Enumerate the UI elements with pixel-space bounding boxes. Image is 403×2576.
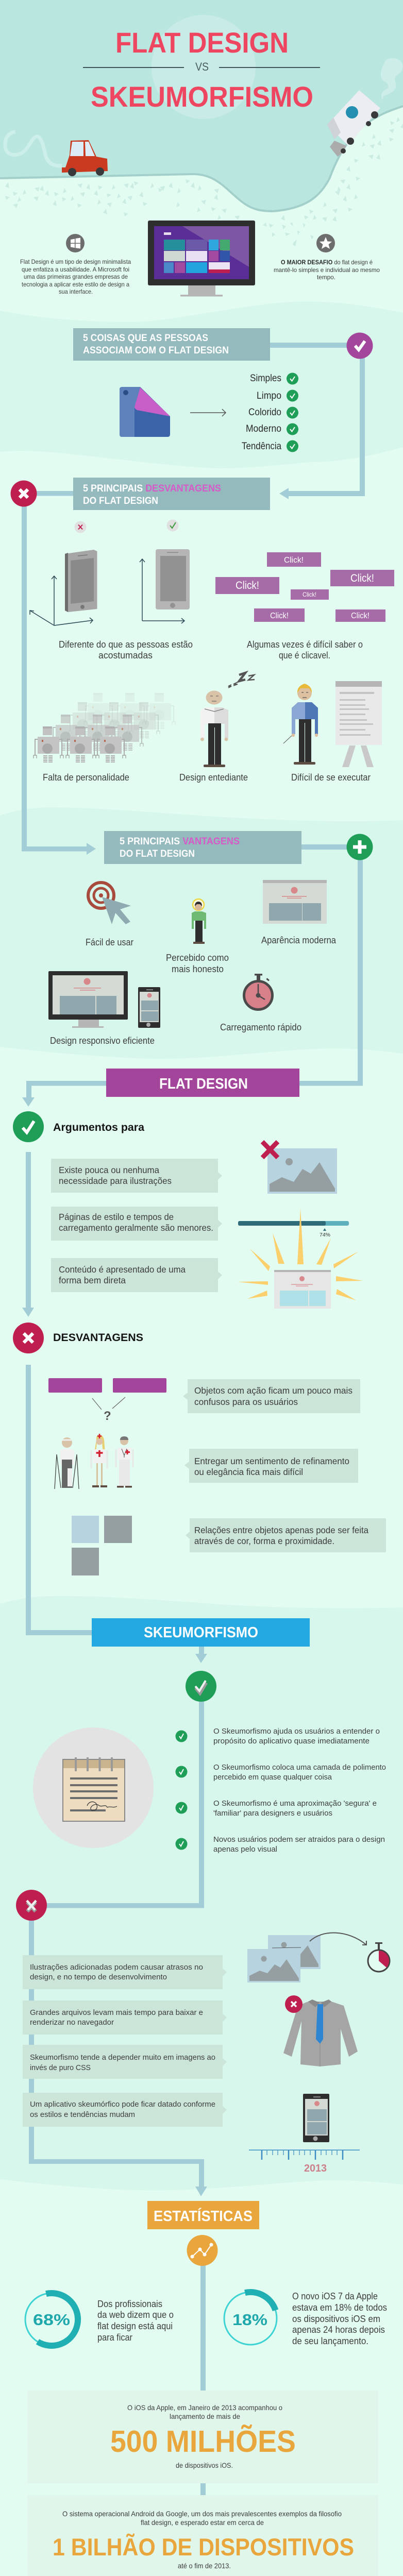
flow connectors bbox=[22, 343, 365, 2576]
icon: click buttons: Click! bbox=[236, 580, 259, 591]
icon: signed notepad bbox=[33, 1727, 154, 1848]
icon: two buttons question: ? bbox=[104, 1409, 111, 1423]
heading: flat design: FLAT DESIGN bbox=[159, 1076, 248, 1092]
text: flat design intro: que enfatiza a usabilidade. A Microsoft foi bbox=[22, 266, 129, 273]
list: flat design associations: Colorido bbox=[248, 407, 281, 418]
list: flat design associations bbox=[242, 373, 298, 452]
icon: click buttons: Click! bbox=[350, 572, 374, 584]
triangles under hero bbox=[263, 222, 314, 246]
icon: straight phone with axes bbox=[140, 549, 190, 623]
callout: object relations: através de cor, forma e proximidade. bbox=[194, 1536, 334, 1546]
text: disadvantage captions: acostumadas bbox=[98, 650, 153, 660]
list: skeumorphism pros: O Skeumorfismo é uma aproximação 'segura' e bbox=[213, 1799, 377, 1808]
background band: things people associate bbox=[0, 301, 403, 468]
callout: illustrations delays: Ilustrações adicionadas podem causar atrasos no bbox=[30, 1963, 203, 1972]
heading: vantagens: 5 PRINCIPAIS VANTAGENS bbox=[120, 836, 240, 847]
heading: estatisticas: ESTATÍSTICAS bbox=[154, 2207, 253, 2225]
panel: 1 bilhao: 1 BILHÃO DE DISPOSITIVOS bbox=[53, 2533, 354, 2561]
icon: red car bbox=[62, 140, 108, 176]
icon: click buttons: Click! bbox=[303, 591, 316, 598]
icon: white van bbox=[327, 90, 380, 157]
title: FLAT DESIGN bbox=[115, 26, 289, 59]
callout: large files: Grandes arquivos levam mais tempo para baixar e bbox=[30, 2008, 203, 2017]
heading: vantagens: DO FLAT DESIGN bbox=[120, 849, 195, 859]
background band: advantages bbox=[0, 807, 403, 1059]
panel: 1 bilhao: flat design, e esperado estar em cerca de bbox=[141, 2518, 264, 2527]
text: 68 percent: da web dizem que o bbox=[97, 2310, 174, 2320]
callout: depends on images: Skeumorfismo tende a depender muito em imagens ao bbox=[30, 2053, 215, 2062]
callout: dated app bbox=[23, 2093, 227, 2127]
icon: progress bar bbox=[238, 1221, 349, 1238]
title bbox=[83, 26, 320, 113]
callout: depends on images: invés de puro CSS bbox=[30, 2063, 91, 2072]
icon: honest man with halo bbox=[192, 899, 206, 944]
callout: direct content bbox=[51, 1258, 222, 1292]
list: skeumorphism pros: Novos usuários podem ser atraidos para o design bbox=[213, 1835, 385, 1844]
icon: stopwatch bbox=[244, 974, 272, 1010]
callout: illustrations bbox=[51, 1159, 222, 1193]
background band: skeumorphism bbox=[0, 1596, 403, 2190]
text: disadvantage captions: Diferente do que as pessoas estão bbox=[59, 639, 193, 650]
text: more disadvantages: Design entediante bbox=[179, 772, 248, 783]
caption: perceived honest bbox=[166, 953, 229, 974]
heading: flat design bbox=[106, 1069, 299, 1097]
text: disadvantage captions bbox=[59, 639, 363, 660]
icon: squares bbox=[72, 1516, 132, 1575]
text: flat design intro: uma das primeiras grandes empresas de bbox=[24, 273, 128, 280]
icon: green plus bbox=[346, 834, 373, 860]
panel: 500 milhoes: 500 MILHÕES bbox=[110, 2425, 296, 2459]
title: VS bbox=[195, 60, 209, 73]
text: flat design intro: Flat Design é um tipo de design minimalista bbox=[20, 258, 131, 265]
icon: tilted phone with axes bbox=[30, 550, 97, 625]
title: SKEUMORFISMO bbox=[91, 80, 313, 113]
arrow bbox=[190, 409, 226, 416]
icon: windows monitor bbox=[148, 221, 255, 297]
callout: confusing objects: confusos para os usuários bbox=[194, 1397, 298, 1407]
list: flat design associations: Limpo bbox=[257, 391, 281, 401]
icon: responsive desktop and phone bbox=[48, 971, 160, 1028]
chart: 18 percent ring bbox=[224, 2292, 277, 2345]
icon: progress bar: 74% bbox=[320, 1232, 330, 1238]
icon: bored man bbox=[200, 673, 255, 767]
text: more disadvantages bbox=[43, 772, 371, 783]
callout: refinement: Entregar um sentimento de refinamento bbox=[194, 1456, 349, 1466]
text: biggest challenge: tempo. bbox=[317, 274, 335, 281]
icon: presenter bbox=[283, 684, 318, 765]
text: biggest challenge bbox=[274, 259, 380, 281]
chart: 18 percent ring: 18% bbox=[232, 2311, 267, 2329]
list: flat design associations: Moderno bbox=[246, 423, 281, 434]
icon: shining window bbox=[238, 1208, 363, 1309]
heading: disadvantages: DESVANTAGENS bbox=[53, 1332, 143, 1344]
callout: object relations: Relações entre objetos apenas pode ser feita bbox=[194, 1525, 368, 1535]
icon: timeline 2013: 2013 bbox=[304, 2163, 327, 2174]
icon: modern window bbox=[263, 880, 327, 924]
icon: click buttons: Click! bbox=[284, 556, 304, 565]
icon: phone 2013 bbox=[303, 2094, 329, 2142]
icon: purple check bbox=[346, 333, 373, 359]
chart: 68 percent ring bbox=[25, 2293, 78, 2346]
heading: arguments for: Argumentos para bbox=[53, 1122, 144, 1133]
list: skeumorphism pros bbox=[175, 1727, 386, 1854]
icon: click buttons: Click! bbox=[270, 612, 289, 620]
heading: desvantagens: DO FLAT DESIGN bbox=[83, 496, 158, 506]
text: flat design intro bbox=[20, 258, 131, 295]
icon: target and cursor bbox=[88, 883, 131, 924]
icon: smoke behind van bbox=[381, 58, 403, 102]
callout: depends on images bbox=[23, 2045, 227, 2079]
icon: robot crowd bbox=[33, 693, 175, 762]
heading: skeumorfismo: SKEUMORFISMO bbox=[144, 1624, 258, 1641]
text: 68 percent: Dos profissionais bbox=[97, 2299, 162, 2309]
text: disadvantage captions: Algumas vezes é difícil saber o bbox=[247, 639, 363, 650]
icon: flip board bbox=[335, 681, 382, 767]
list: skeumorphism pros: percebido em quase qualquer coisa bbox=[213, 1773, 332, 1782]
callout: loading times: carregamento geralmente são menores. bbox=[59, 1223, 213, 1233]
callout: dated app: os estilos e tendências mudam bbox=[30, 2110, 135, 2119]
text: 18 percent: O novo iOS 7 da Apple bbox=[292, 2291, 378, 2301]
callout: illustrations delays: design, e no tempo de desenvolvimento bbox=[30, 1973, 167, 1981]
callout: large files: renderizar no navegador bbox=[30, 2018, 114, 2027]
panel: 500 milhoes: de dispositivos iOS. bbox=[176, 2461, 233, 2469]
icon: red x bbox=[10, 480, 37, 507]
callout: large files bbox=[23, 2001, 227, 2035]
hill bbox=[0, 106, 403, 223]
text: 68 percent: para ficar bbox=[97, 2332, 132, 2343]
icon: click buttons bbox=[215, 552, 394, 622]
callout: direct content: forma bem direta bbox=[59, 1275, 126, 1285]
list: skeumorphism pros: O Skeumorfismo coloca uma camada de polimento bbox=[213, 1763, 386, 1772]
panel: 1 bilhao: O sistema operacional Android da Google, um dos mais prevalescentes exemplos da filosofio bbox=[62, 2510, 342, 2518]
icon: patient nurse doctor bbox=[55, 1434, 133, 1489]
callout: object relations bbox=[186, 1518, 386, 1552]
icon: pictures to stopwatch bbox=[247, 1933, 390, 1982]
panel: 500 milhoes: lançamento de mais de bbox=[170, 2412, 240, 2420]
callout: refinement bbox=[184, 1449, 358, 1483]
heading: 5 coisas: 5 COISAS QUE AS PESSOAS bbox=[83, 333, 208, 344]
icon: 3d x bbox=[16, 1890, 47, 1921]
icon: red x second bbox=[13, 1323, 44, 1353]
callout: loading times bbox=[51, 1207, 222, 1241]
heading: 5 coisas: ASSOCIAM COM O FLAT DESIGN bbox=[83, 345, 229, 356]
list: skeumorphism pros: apenas pelo visual bbox=[213, 1845, 277, 1854]
panel: 500 milhoes bbox=[27, 2391, 378, 2483]
caption: modern appearance: Aparência moderna bbox=[261, 935, 337, 945]
icon: colour swatch bbox=[120, 387, 170, 437]
heading: desvantagens: 5 PRINCIPAIS DESVANTAGENS bbox=[83, 483, 221, 494]
panel: 500 milhoes: O iOS da Apple, em Janeiro de 2013 acompanhou o bbox=[127, 2403, 282, 2412]
caption: perceived honest: mais honesto bbox=[172, 964, 224, 974]
caption: easy to use: Fácil de usar bbox=[86, 937, 133, 947]
icon: two buttons question bbox=[48, 1378, 166, 1423]
text: 18 percent: de seu lançamento. bbox=[292, 2336, 368, 2346]
list: skeumorphism pros: 'familiar' para designers e usuários bbox=[213, 1809, 332, 1818]
heading: desvantagens bbox=[73, 478, 270, 510]
text: more disadvantages: Falta de personalidade bbox=[43, 772, 129, 783]
heading: 5 coisas bbox=[73, 328, 270, 361]
icon: mini check badge bbox=[167, 519, 178, 532]
list: flat design associations: Tendência bbox=[242, 441, 281, 452]
icon: timeline 2013 bbox=[249, 2149, 360, 2174]
callout: illustrations: Existe pouca ou nenhuma bbox=[59, 1165, 159, 1175]
callout: confusing objects bbox=[183, 1379, 360, 1413]
icon: 3d check bbox=[186, 1671, 216, 1702]
caption: responsive design: Design responsivo eficiente bbox=[50, 1036, 155, 1046]
text: 18 percent: os dispositivos iOS em bbox=[292, 2314, 380, 2324]
text: 68 percent bbox=[97, 2299, 174, 2343]
caption: perceived honest: Percebido como bbox=[166, 953, 229, 963]
callout: loading times: Páginas de estilo e tempos de bbox=[59, 1212, 174, 1222]
text: 18 percent bbox=[292, 2291, 387, 2346]
callout: illustrations: necessidade para ilustrações bbox=[59, 1176, 172, 1186]
text: disadvantage captions: que é clicavel. bbox=[279, 650, 330, 660]
list: skeumorphism pros: propósito do aplicativo quase imediatamente bbox=[213, 1737, 370, 1745]
icon: smoke behind car bbox=[5, 132, 62, 166]
icon: star bbox=[316, 234, 335, 252]
icon: click buttons: Click! bbox=[351, 612, 370, 620]
panel: hero scene bbox=[0, 0, 403, 223]
callout: confusing objects: Objetos com ação ficam um pouco mais bbox=[194, 1385, 352, 1396]
callout: dated app: Um aplicativo skeumórfico pode ficar datado conforme bbox=[30, 2100, 215, 2109]
text: 18 percent: estava em 18% de todos bbox=[292, 2302, 387, 2313]
caption: fast loading: Carregamento rápido bbox=[220, 1022, 301, 1032]
text: biggest challenge: O MAIOR DESAFIO do flat design é bbox=[281, 259, 373, 266]
callout: refinement: ou elegância fica mais difícil bbox=[194, 1467, 303, 1477]
icon: green check bbox=[13, 1111, 44, 1142]
icon: crossed-out picture bbox=[262, 1142, 337, 1194]
icon: chart badge bbox=[187, 2235, 217, 2266]
callout: direct content: Conteúdo é apresentado de uma bbox=[59, 1264, 186, 1275]
text: 18 percent: apenas 24 horas depois bbox=[292, 2325, 385, 2335]
icon: mini x badge bbox=[74, 521, 87, 533]
list: flat design associations: Simples bbox=[250, 373, 281, 384]
icon: windows logo bbox=[66, 234, 85, 252]
text: biggest challenge: mantê-lo simples e individual ao mesmo bbox=[274, 266, 380, 274]
icon: shirt with x bbox=[283, 1995, 358, 2066]
chart: 68 percent ring: 68% bbox=[33, 2311, 70, 2329]
text: flat design intro: tecnologia a aplicar este estilo de design a bbox=[22, 281, 129, 288]
text: 68 percent: flat design está aqui bbox=[97, 2321, 173, 2331]
panel: 1 bilhao bbox=[27, 2495, 378, 2576]
heading: vantagens bbox=[104, 831, 301, 864]
callout: illustrations delays bbox=[23, 1955, 227, 1989]
text: flat design intro: sua interface. bbox=[59, 288, 93, 295]
list: skeumorphism pros: O Skeumorfismo ajuda os usuários a entender o bbox=[213, 1727, 380, 1736]
text: more disadvantages: Difícil de se executar bbox=[291, 772, 371, 783]
panel: 1 bilhao: até o fim de 2013. bbox=[178, 2562, 231, 2570]
heading: estatisticas bbox=[147, 2201, 259, 2229]
heading: skeumorfismo bbox=[92, 1618, 310, 1647]
